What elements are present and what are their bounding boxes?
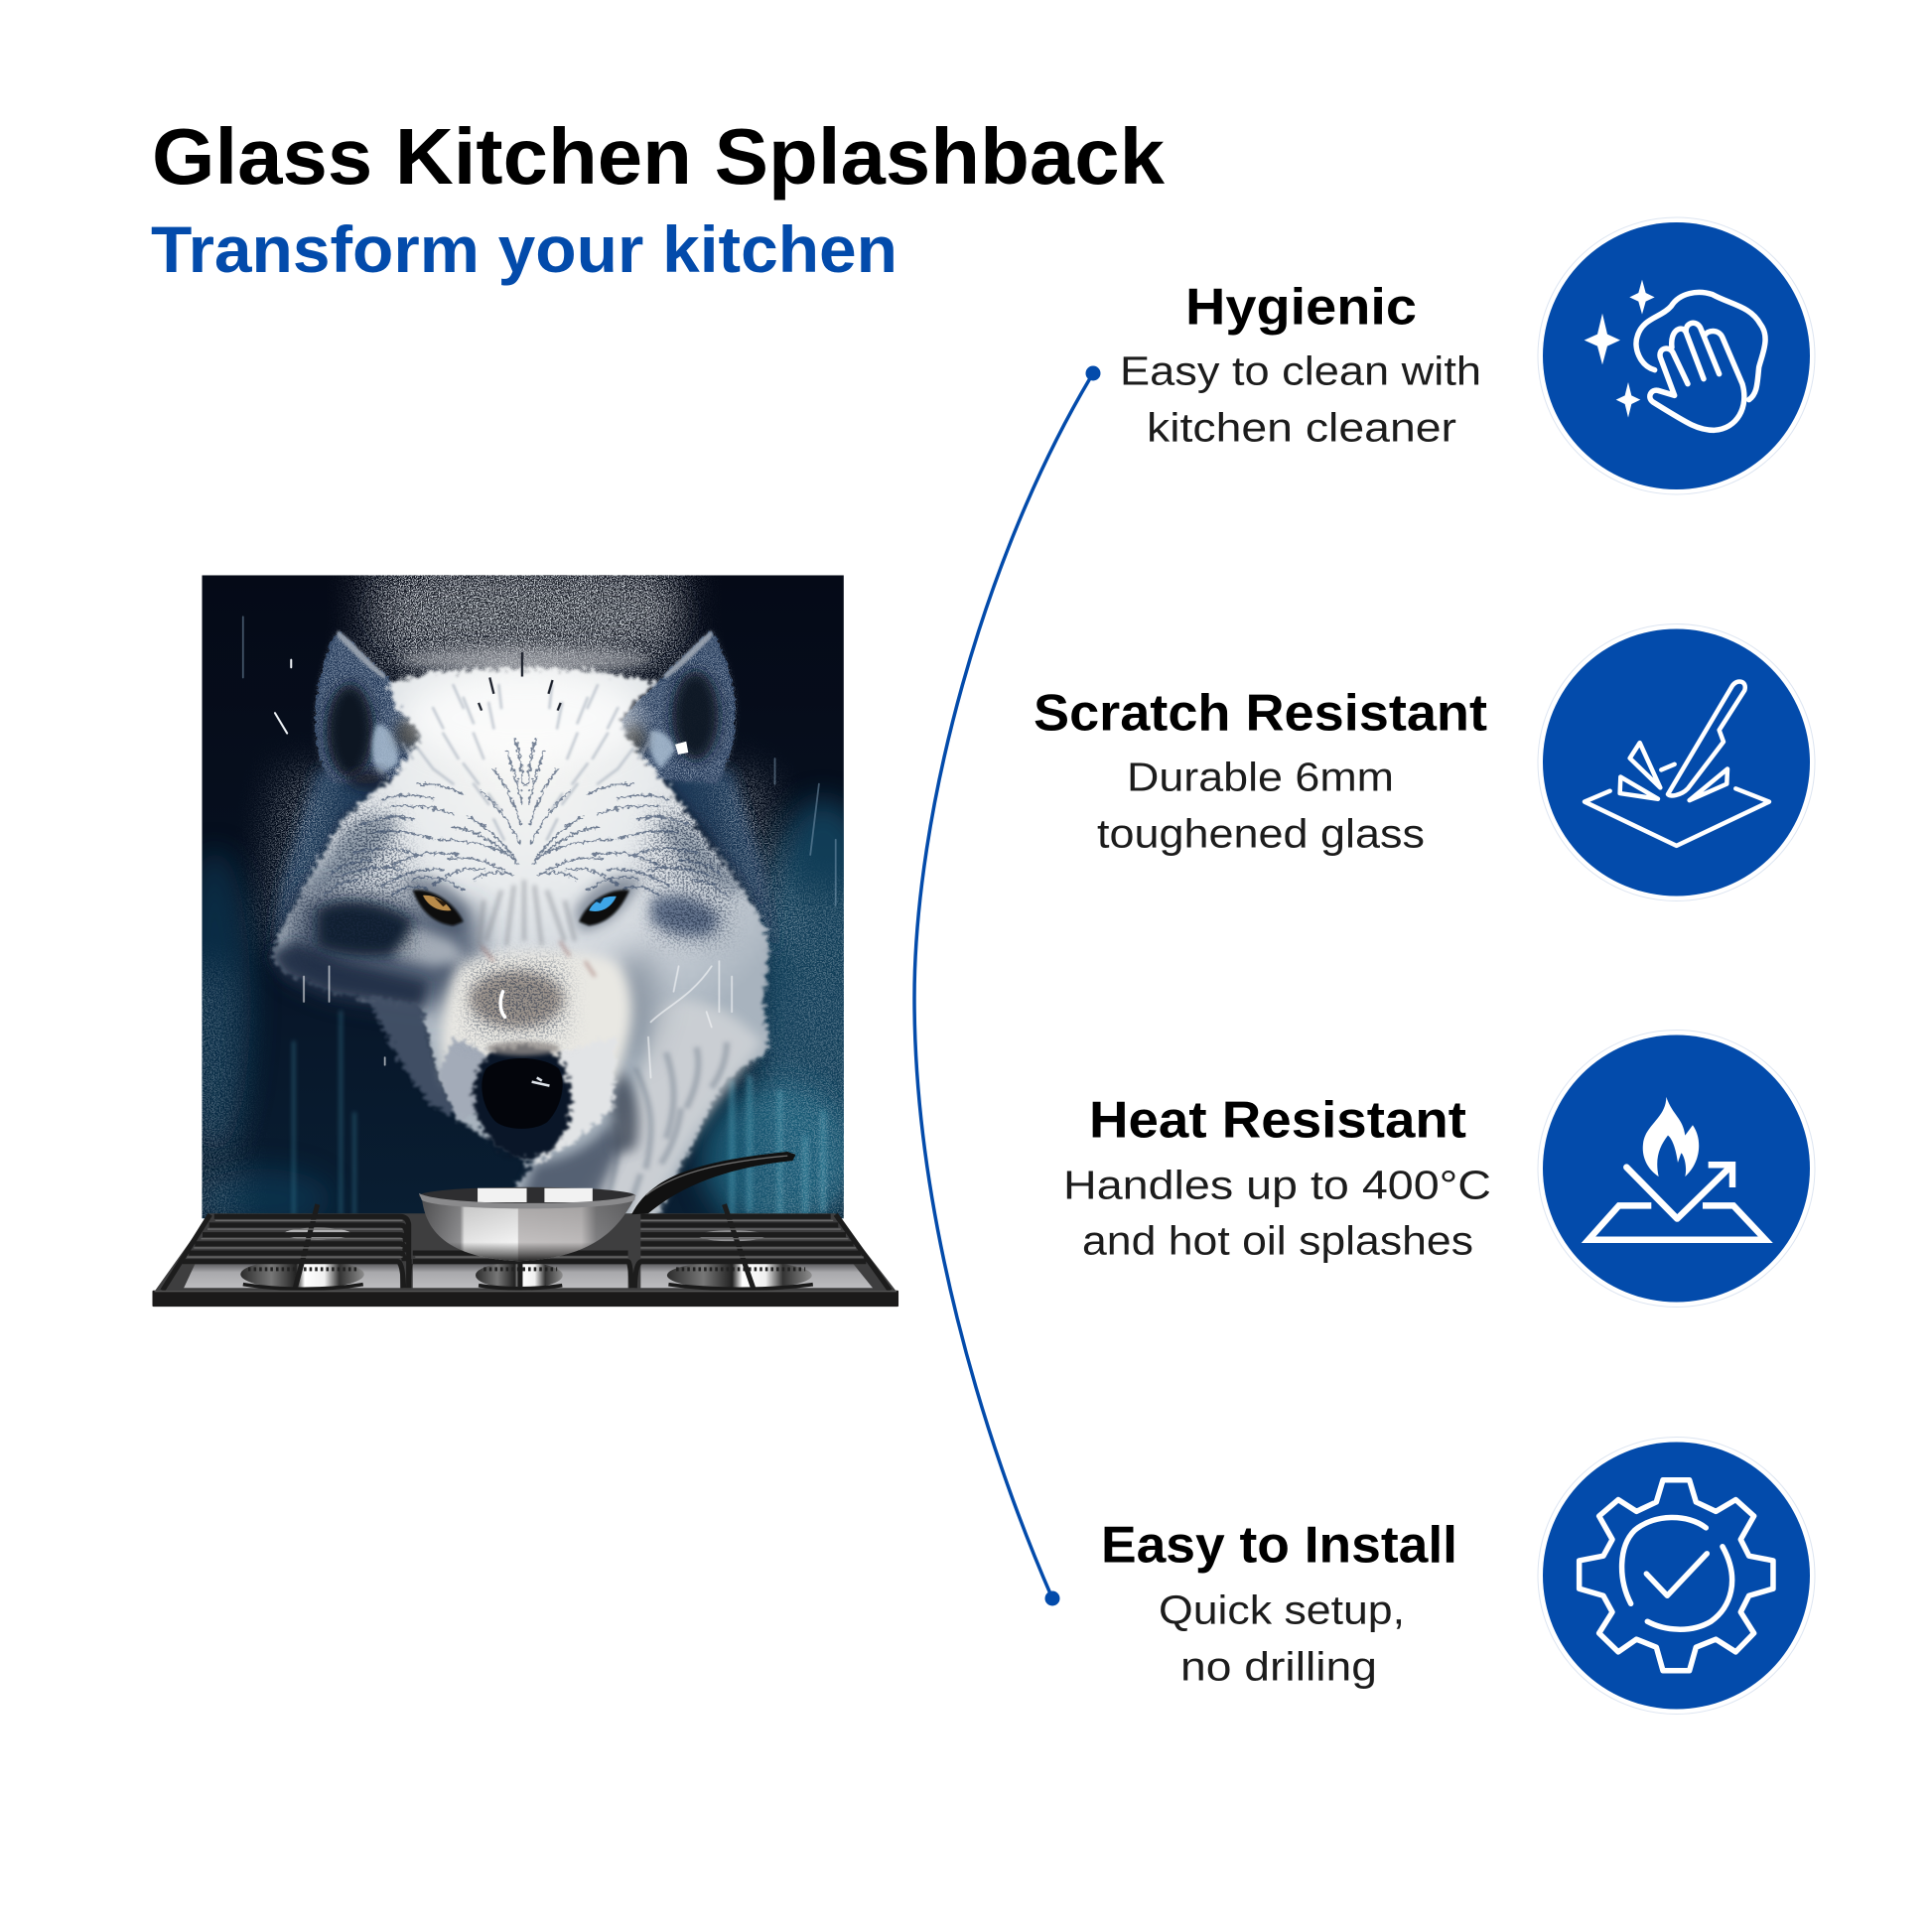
hob deck (155, 1213, 897, 1292)
grey fade on lower left cheek (367, 997, 458, 1118)
fur lines, left and mirrored right (324, 685, 727, 896)
icon: cleaning hand (1538, 217, 1815, 494)
product image: splashback and stove (152, 556, 898, 1307)
dust cloud at top (367, 556, 681, 673)
wolf head fur (268, 652, 768, 1219)
feature: Heat Resistant (1063, 1092, 1491, 1263)
feature: Scratch Resistant: Scratch Resistant (1034, 685, 1487, 743)
lit cheek strip under left eye (392, 925, 469, 966)
chin shadow (473, 1046, 571, 1160)
left eye (413, 890, 464, 925)
feature: Scratch Resistant: Durable 6mm (1127, 755, 1394, 800)
grate highlights (187, 1220, 864, 1257)
white drips on cheek (304, 961, 732, 1078)
dark lower-left edge of face (268, 941, 428, 1010)
icon: gear with check (1538, 1438, 1815, 1714)
dark eye masks (318, 901, 415, 955)
wolf splashback panel (202, 575, 844, 1219)
right mane (595, 999, 768, 1213)
feature: Easy to Install: no drilling (1180, 1644, 1377, 1690)
pan body (422, 1198, 634, 1261)
nose bridge fur (479, 881, 575, 946)
feature: Scratch Resistant (1034, 685, 1487, 856)
feature: Heat Resistant: Heat Resistant (1089, 1092, 1466, 1150)
feature: Hygienic: Hygienic (1185, 278, 1417, 336)
feature: Easy to Install: Easy to Install (1101, 1517, 1457, 1575)
reddish marks (482, 941, 595, 976)
feature: Heat Resistant: Handles up to 400°C (1063, 1162, 1491, 1207)
stove hob (152, 1204, 898, 1307)
speckle halo around head (261, 773, 797, 946)
burners (240, 1228, 813, 1290)
lower background speckle (175, 891, 874, 1235)
feature: Easy to Install (1101, 1517, 1457, 1690)
broad shade under left eye (286, 891, 479, 1007)
grates (163, 1204, 890, 1291)
dark top marks (479, 652, 561, 711)
front lip (152, 1291, 898, 1307)
muzzle (442, 950, 631, 1083)
feature: Hygienic: Easy to clean with (1120, 347, 1481, 393)
subtitle: Transform your kitchen (151, 212, 897, 286)
right ear (618, 630, 736, 784)
drips and rain streaks (243, 617, 836, 1214)
feature: Hygienic (1120, 278, 1481, 451)
title: Glass Kitchen Splashback (152, 112, 1166, 201)
connector curve with end dots (914, 365, 1100, 1606)
feature: Scratch Resistant: toughened glass (1097, 810, 1425, 856)
feature: Heat Resistant: and hot oil splashes (1082, 1217, 1473, 1263)
feature: Easy to Install: Quick setup, (1159, 1587, 1405, 1632)
forehead highlight (408, 672, 640, 763)
blue neck shoulders behind head (273, 768, 777, 951)
steel panels (184, 1264, 873, 1288)
left ear (315, 630, 433, 788)
shaded patches beside the head (307, 817, 397, 891)
feature: Hygienic: kitchen cleaner (1147, 405, 1456, 451)
right eye (579, 890, 629, 925)
nose (482, 1058, 563, 1129)
frying pan (419, 1152, 795, 1261)
icon: flame and heat reflection (1538, 1031, 1815, 1307)
mottled dark specks on fur (291, 809, 742, 951)
pan handle (631, 1152, 795, 1214)
soft fur above nose (486, 1041, 560, 1055)
icon: knife on glass (1538, 623, 1815, 901)
pan rim (419, 1187, 635, 1204)
